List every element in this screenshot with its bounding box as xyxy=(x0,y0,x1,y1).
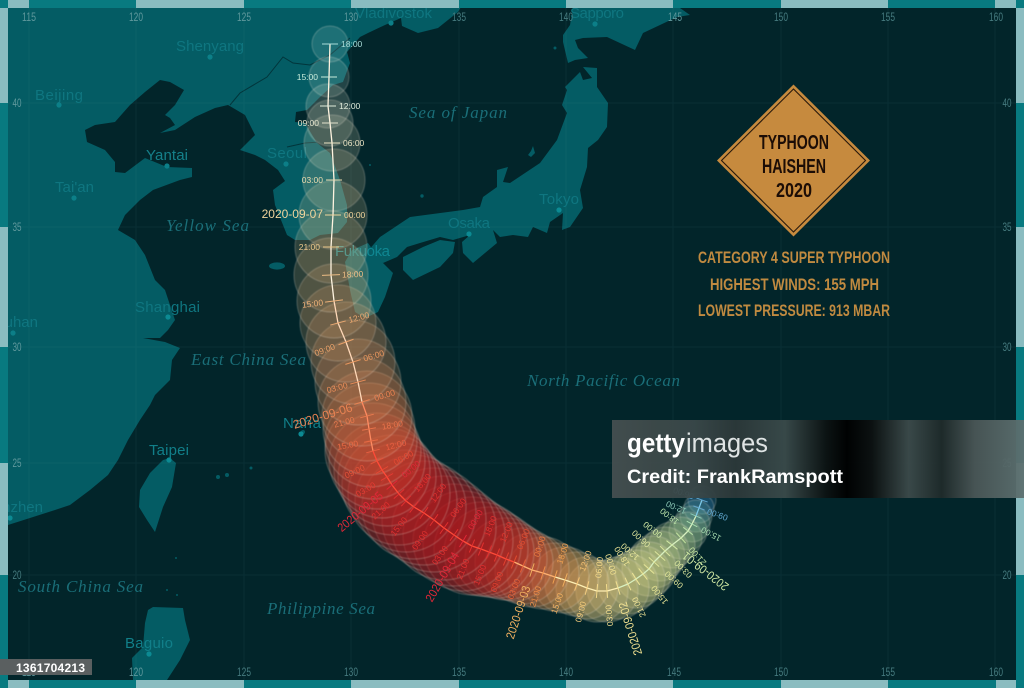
graticule labels: 40 xyxy=(1002,96,1012,110)
typhoon wind circles xyxy=(294,26,716,622)
city: Tokyo: Tokyo xyxy=(539,191,579,208)
track ticks and time labels: 15:00 xyxy=(301,297,324,310)
2020-09-01 label: 00:00 xyxy=(641,519,664,540)
track ticks and time labels: 21:00 xyxy=(299,242,320,252)
sign: typhoon diamond xyxy=(717,84,870,236)
2020-09-03 label: 00:00 xyxy=(532,535,548,558)
track ticks and time labels: 03:00 xyxy=(302,175,323,185)
track ticks and time labels: 09:00 xyxy=(573,600,588,623)
graticule labels: 150 xyxy=(774,665,788,679)
graticule labels: 125 xyxy=(237,665,251,679)
sign text: HAISHEN: HAISHEN xyxy=(762,156,826,178)
graticule labels: 115 xyxy=(22,665,36,679)
2020-09-07 label xyxy=(262,207,366,221)
track ticks and time labels: 12:00 xyxy=(618,541,641,563)
graticule labels: 130 xyxy=(344,10,358,24)
city: Fukuoka: Fukuoka xyxy=(335,243,391,260)
land: Asian mainland xyxy=(0,0,465,527)
sea labels xyxy=(18,103,680,618)
graticule labels: 35 xyxy=(12,220,22,234)
sea: South China Sea: South China Sea xyxy=(18,577,143,596)
graticule labels: 120 xyxy=(129,665,143,679)
stat: highest winds: HIGHEST WINDS: 155 MPH xyxy=(710,275,879,294)
track ticks and time labels: 15:00 xyxy=(471,563,488,587)
track ticks and time labels: 03:00 xyxy=(354,480,378,499)
track ticks and time labels: 06:00 xyxy=(515,527,532,551)
track ticks and time labels: 15:00 xyxy=(297,72,318,82)
land: Kyushu xyxy=(345,243,393,318)
2020-09-02 label: 2020-09-02 xyxy=(616,600,645,657)
graticule labels: 125 xyxy=(237,10,251,24)
track ticks and time labels: 06:00 xyxy=(672,485,695,502)
2020-09-05 label: 00:00 xyxy=(400,458,422,480)
track ticks and time labels: 15:00 xyxy=(336,438,359,452)
typhoon track line xyxy=(328,44,702,591)
sea: Sea of Japan: Sea of Japan xyxy=(409,103,507,122)
track ticks and time labels: 09:00 xyxy=(298,118,319,128)
track ticks and time labels: 06:00 xyxy=(392,448,415,467)
land masses xyxy=(0,0,690,680)
track ticks and time labels: 12:00 xyxy=(664,499,688,516)
land: Luzon xyxy=(132,607,190,680)
watermark: credit: Credit: FrankRamspott xyxy=(627,467,844,488)
graticule labels: 145 xyxy=(667,665,681,679)
city labels xyxy=(0,5,624,657)
graticule labels: 140 xyxy=(559,10,573,24)
track ticks and time labels: 03:00 xyxy=(603,604,615,627)
land: Sado island xyxy=(528,146,535,157)
land: Jeju xyxy=(269,262,285,270)
land: Hokkaido xyxy=(563,8,690,63)
track ticks and time labels: 12:00 xyxy=(577,549,594,573)
city: Seoul: Seoul xyxy=(267,145,307,162)
city: Vladivostok: Vladivostok xyxy=(355,5,432,22)
track ticks and time labels: 21:00 xyxy=(630,595,648,619)
2020-09-04 label: 2020-09-04 xyxy=(422,549,462,604)
city: Tai'an: Tai'an xyxy=(55,179,94,196)
sea: East China Sea: East China Sea xyxy=(190,350,306,369)
track ticks and time labels: 21:00 xyxy=(527,585,544,608)
graticule labels: 25 xyxy=(1002,456,1012,470)
graticule labels: 135 xyxy=(452,10,466,24)
graticule labels: 30 xyxy=(1002,340,1012,354)
track ticks and time labels: 15:00 xyxy=(649,583,670,606)
sign text: 2020: 2020 xyxy=(776,180,812,202)
graticule labels: 145 xyxy=(668,10,682,24)
stat: lowest pressure: LOWEST PRESSURE: 913 MBAR xyxy=(698,301,890,320)
2020-09-01 label xyxy=(640,518,731,594)
2020-09-06 label: 2020-09-06 xyxy=(291,400,354,432)
stat: category: CATEGORY 4 SUPER TYPHOON xyxy=(698,248,890,267)
graticule labels: 135 xyxy=(452,665,466,679)
city: Yantai: Yantai xyxy=(146,147,188,164)
sign text: TYPHOON: TYPHOON xyxy=(759,132,829,154)
land: Taiwan xyxy=(139,458,176,532)
city: Shanghai: Shanghai xyxy=(135,299,200,316)
track ticks and time labels: 03:00 xyxy=(430,543,450,567)
graticule labels: 20 xyxy=(1002,568,1012,582)
graticule labels: 140 xyxy=(559,665,573,679)
city: Taipei: Taipei xyxy=(149,442,189,459)
2020-09-02 label xyxy=(601,552,645,657)
track ticks and time labels: 15:00 xyxy=(388,515,409,538)
track ticks and time labels: 09:00 xyxy=(410,528,430,552)
track ticks and time labels: 21:00 xyxy=(686,545,708,568)
land: small islands xyxy=(166,46,556,596)
2020-09-03 label: 2020-09-03 xyxy=(503,584,533,641)
2020-09-05 label: 2020-09-05 xyxy=(335,488,386,535)
2020-09-04 label xyxy=(422,507,487,604)
track ticks and time labels: 06:00 xyxy=(448,496,468,519)
track ticks and time labels: 03:00 xyxy=(326,380,349,395)
track ticks and time labels: 03:00 xyxy=(505,577,522,601)
track ticks and time labels: 03:00 xyxy=(672,558,694,580)
2020-09-03 label xyxy=(503,534,550,641)
city: Beijing: Beijing xyxy=(35,87,83,104)
sea: Philippine Sea: Philippine Sea xyxy=(266,599,375,618)
track ticks and time labels: 15:00 xyxy=(549,591,565,615)
track ticks and time labels: 09:00 xyxy=(488,570,505,594)
track ticks and time labels: 18:00 xyxy=(341,39,363,49)
watermark: images logo: images xyxy=(686,428,768,458)
city: Osaka: Osaka xyxy=(448,215,491,232)
graticule labels: 40 xyxy=(12,96,22,110)
track ticks and time labels: 18:00 xyxy=(658,506,681,527)
country borders xyxy=(230,38,350,147)
track ticks and time labels: 06:00 xyxy=(593,556,605,578)
watermark band xyxy=(612,420,1024,498)
2020-09-06 label: 00:00 xyxy=(373,387,396,403)
graticule labels: 25 xyxy=(12,456,22,470)
track ticks and time labels: 15:00 xyxy=(699,525,723,544)
image id badge: 1361704213 xyxy=(16,661,85,675)
city: Naha: Naha xyxy=(283,415,322,432)
city: Baguio: Baguio xyxy=(125,635,173,652)
sea: Yellow Sea: Yellow Sea xyxy=(166,216,249,235)
track ticks and time labels: 06:00 xyxy=(343,138,365,148)
2020-09-05 label xyxy=(335,457,424,535)
city: Sapporo: Sapporo xyxy=(570,5,624,22)
2020-09-07 label: 2020-09-07 xyxy=(262,207,323,221)
track ticks and time labels: 12:00 xyxy=(339,101,361,111)
track ticks and time labels: 21:00 xyxy=(454,557,471,581)
graticule labels: 130 xyxy=(344,665,358,679)
graticule labels: 160 xyxy=(989,665,1003,679)
track ticks and time labels: 18:00 xyxy=(342,269,364,280)
land: Honshu xyxy=(367,67,608,263)
track ticks and time labels: 18:00 xyxy=(555,542,571,565)
2020-09-02 label: 00:00 xyxy=(603,553,619,576)
track ticks and time labels: 18:00 xyxy=(612,545,632,568)
track ticks and time labels: 18:00 xyxy=(412,471,433,494)
track ticks and time labels: 09:00 xyxy=(662,569,685,591)
graticule labels: 30 xyxy=(12,340,22,354)
track ticks and time labels: 09:00 xyxy=(343,462,367,480)
2020-09-07 label: 00:00 xyxy=(344,210,366,220)
graticule labels: 150 xyxy=(774,10,788,24)
sea: North Pacific Ocean: North Pacific Ocean xyxy=(526,371,680,390)
graticule labels: 20 xyxy=(12,568,22,582)
2020-09-06 label xyxy=(291,387,398,432)
track ticks and time labels: 21:00 xyxy=(333,414,356,430)
graticule labels: 35 xyxy=(1002,220,1012,234)
graticule labels: 160 xyxy=(989,10,1003,24)
2020-09-01 label: 2020-09-01 xyxy=(679,549,731,594)
track ticks and time labels: 09:00 xyxy=(313,341,337,358)
land: Shikoku xyxy=(403,240,455,280)
city: Shenyang: Shenyang xyxy=(176,38,244,55)
track ticks and time labels: 12:00 xyxy=(347,310,371,325)
track ticks and time labels: 12:00 xyxy=(384,437,408,452)
graticule labels: 155 xyxy=(881,665,895,679)
stats text block xyxy=(698,248,890,320)
graticule labels: 120 xyxy=(129,10,143,24)
watermark: getty logo: getty xyxy=(627,428,685,458)
track ticks and time labels xyxy=(262,39,731,657)
track ticks and time labels: 09:00 xyxy=(706,506,729,523)
track ticks and time labels: 18:00 xyxy=(381,418,404,432)
track ticks and time labels: 12:00 xyxy=(498,520,515,544)
track ticks and time labels: 06:00 xyxy=(362,348,386,364)
track ticks and time labels: 21:00 xyxy=(369,499,392,521)
track ticks and time labels: 12:00 xyxy=(428,481,448,504)
image id badge xyxy=(0,659,92,675)
track ticks and time labels: 06:00 xyxy=(629,528,652,550)
graticule labels: 115 xyxy=(22,10,36,24)
track ticks and time labels: 18:00 xyxy=(482,514,499,538)
2020-09-04 label: 00:00 xyxy=(466,508,485,531)
graticule labels: 155 xyxy=(881,10,895,24)
